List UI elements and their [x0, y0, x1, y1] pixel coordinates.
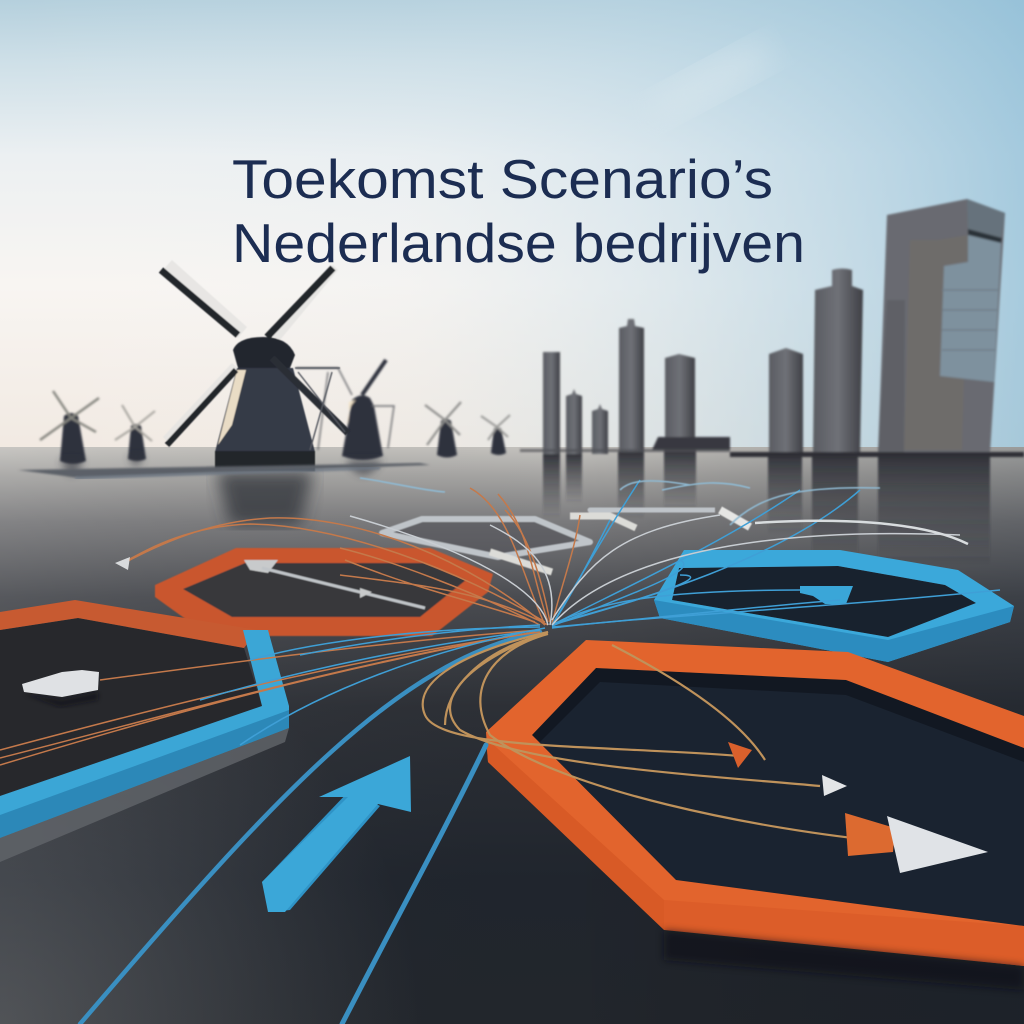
blue hexagon, upper right	[654, 550, 1014, 662]
sky background	[0, 0, 1024, 460]
orange hexagon, upper left	[155, 548, 493, 636]
base	[215, 451, 315, 471]
white arrow, left	[22, 670, 99, 697]
sails	[161, 260, 338, 445]
big blue arrow	[262, 756, 411, 912]
windmill left	[115, 405, 155, 461]
grey wires	[350, 515, 960, 625]
reflective floor	[0, 447, 1024, 1024]
big orange and white arrowhead	[845, 813, 988, 873]
tower body	[215, 368, 315, 452]
windmill medium	[296, 360, 394, 460]
distant pale-blue wires	[360, 478, 880, 525]
blue wires	[200, 480, 1000, 745]
white arrow shadow	[24, 692, 98, 707]
left tail arrowhead	[115, 557, 130, 570]
orange wires	[0, 488, 580, 765]
blue streaks on floor	[80, 632, 540, 1024]
cap	[233, 337, 295, 368]
main windmill	[161, 260, 348, 471]
orange arrowhead	[728, 742, 752, 768]
white arrowhead	[822, 775, 847, 796]
tan wires	[423, 632, 890, 842]
small arrowheads on lower right	[115, 557, 847, 796]
title: Toekomst Scenario’s	[232, 149, 773, 210]
small grey arrow	[244, 560, 278, 573]
converging wires	[0, 480, 1000, 842]
skyline towers	[520, 199, 1024, 566]
tower reflections	[543, 450, 990, 566]
distant windmills	[40, 360, 510, 464]
large office tower	[878, 199, 1005, 453]
windmill far left	[40, 391, 99, 464]
large orange hexagon, lower right	[486, 640, 1024, 990]
windmill water reflections	[18, 456, 430, 525]
grey hexagon far	[382, 510, 750, 572]
blades	[161, 270, 238, 335]
subtitle line: Nederlandse bedrijven	[232, 213, 805, 274]
small blue arrow	[800, 586, 853, 604]
windmill centre right	[425, 402, 461, 458]
left hexagon, orange and blue	[0, 600, 289, 862]
white wire, upper right	[755, 521, 968, 544]
windmill small	[481, 415, 510, 455]
